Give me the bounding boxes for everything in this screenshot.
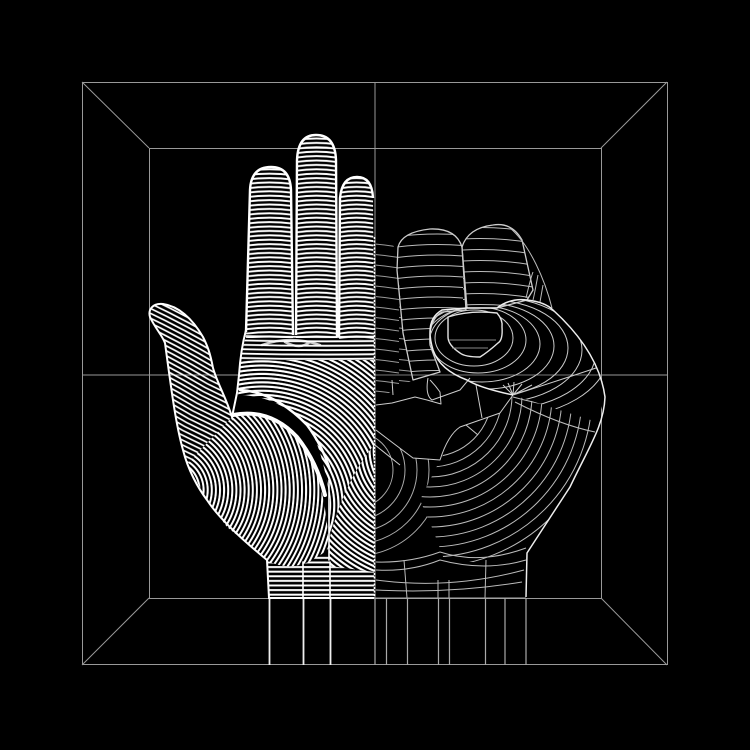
- palm creases: [233, 340, 330, 598]
- thenar: [187, 416, 329, 566]
- middle curled finger: [397, 229, 466, 380]
- upper palm: [238, 335, 374, 395]
- thumb contour rings: [430, 300, 600, 409]
- fist silhouette: [376, 225, 605, 597]
- centre edge: [374, 237, 376, 598]
- fist outline: [430, 300, 605, 597]
- lower palm bowl: [329, 445, 374, 572]
- wrist extension lines: [270, 598, 526, 665]
- perspective frame: [82, 82, 668, 665]
- wrist: [267, 555, 374, 598]
- open hand: [150, 135, 374, 598]
- finger side ridges: [510, 228, 552, 308]
- middle finger: [296, 135, 337, 338]
- index finger: [246, 167, 293, 338]
- ring finger: [339, 177, 374, 340]
- hand outline: [150, 304, 374, 598]
- palm contour arcs: [375, 437, 430, 554]
- inner fingers and knuckle creases: [375, 378, 513, 465]
- fist: [374, 224, 606, 598]
- wrist columns: [404, 560, 486, 598]
- front curled finger: [462, 225, 533, 308]
- forearm contour arcs: [421, 395, 600, 562]
- finger outlines: [246, 135, 373, 337]
- lower wrist lines: [376, 548, 526, 591]
- fist horizontal guide: [376, 374, 600, 376]
- thumbnail lines: [449, 340, 496, 348]
- palm band along crease: [238, 360, 374, 540]
- thumb: [150, 304, 232, 464]
- back finger: [376, 237, 413, 400]
- thumbnail: [448, 312, 502, 357]
- bottom edge: [375, 597, 526, 599]
